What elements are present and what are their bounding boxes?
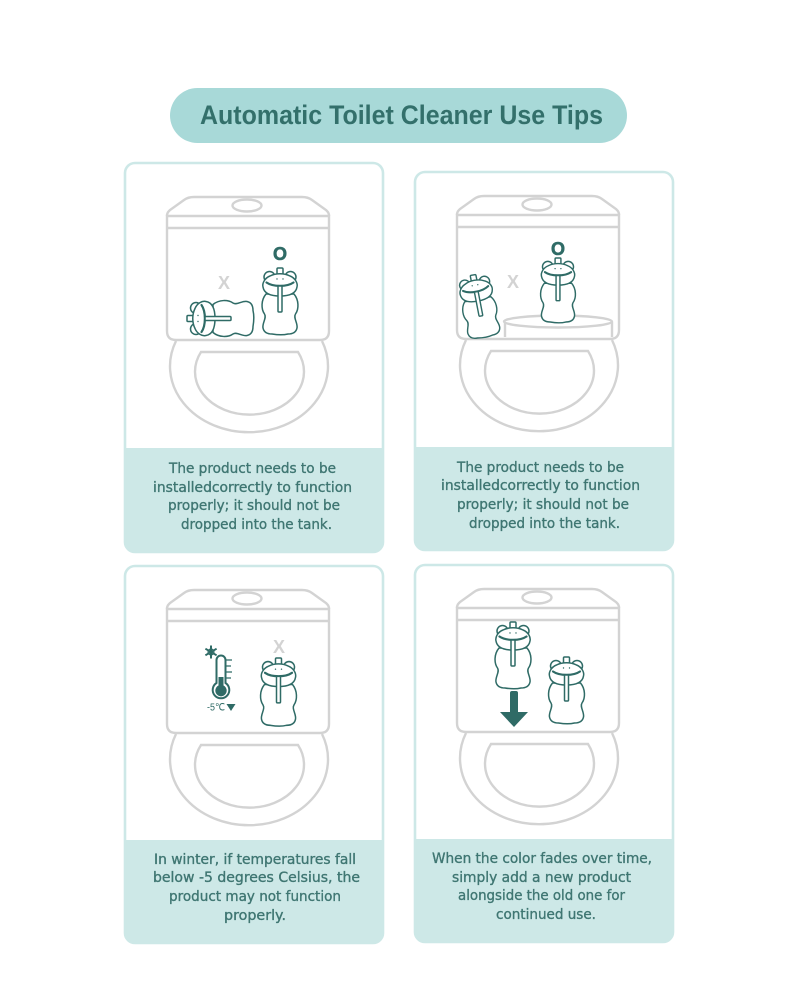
icon: new frog bbox=[495, 622, 531, 689]
caption: alongside the old one for bbox=[458, 888, 625, 904]
caption: dropped into the tank. bbox=[181, 517, 332, 533]
caption: In winter, if temperatures fall bbox=[154, 852, 356, 868]
correct mark: O bbox=[551, 239, 565, 259]
panel: winter temperature bbox=[125, 566, 383, 943]
caption: properly; it should not be bbox=[457, 497, 629, 513]
caption bbox=[153, 461, 352, 533]
toilet illustration bbox=[457, 589, 619, 824]
caption: properly. bbox=[224, 908, 286, 924]
icon: thermometer: -5℃ bbox=[207, 702, 225, 714]
caption bbox=[432, 851, 652, 923]
wrong mark: X bbox=[273, 637, 285, 657]
caption: continued use. bbox=[496, 907, 596, 923]
caption: installedcorrectly to function bbox=[441, 478, 640, 494]
panel: install upright bbox=[125, 163, 383, 552]
title bbox=[170, 88, 627, 143]
caption: below -5 degrees Celsius, the bbox=[153, 870, 360, 886]
icon: tilted frog bbox=[456, 272, 502, 341]
caption bbox=[153, 852, 360, 924]
toilet illustration bbox=[457, 196, 619, 431]
icon: frog upright bbox=[261, 658, 296, 726]
panel: replacing faded product bbox=[415, 565, 673, 942]
caption bbox=[441, 460, 640, 532]
icon: frog upright bbox=[262, 268, 298, 335]
icon: frog on platform bbox=[541, 258, 575, 323]
icon: frog lying down bbox=[187, 301, 254, 336]
icon: thermometer bbox=[205, 646, 236, 714]
caption: simply add a new product bbox=[452, 870, 631, 886]
toilet illustration bbox=[167, 590, 329, 825]
wrong mark: X bbox=[507, 272, 519, 292]
caption: product may not function bbox=[169, 889, 341, 905]
icon: old frog bbox=[549, 657, 584, 724]
panel: do not drop in tank bbox=[415, 172, 673, 550]
caption: dropped into the tank. bbox=[469, 516, 620, 532]
title: Automatic Toilet Cleaner Use Tips bbox=[200, 100, 603, 130]
caption: The product needs to be bbox=[456, 460, 624, 476]
caption: properly; it should not be bbox=[168, 498, 340, 514]
correct mark: O bbox=[273, 244, 287, 264]
arrow: down bbox=[500, 691, 528, 727]
caption: The product needs to be bbox=[168, 461, 336, 477]
caption: installedcorrectly to function bbox=[153, 480, 352, 496]
toilet illustration bbox=[167, 197, 329, 432]
caption: When the color fades over time, bbox=[432, 851, 652, 867]
platform in tank bbox=[504, 316, 612, 337]
wrong mark: X bbox=[218, 273, 230, 293]
